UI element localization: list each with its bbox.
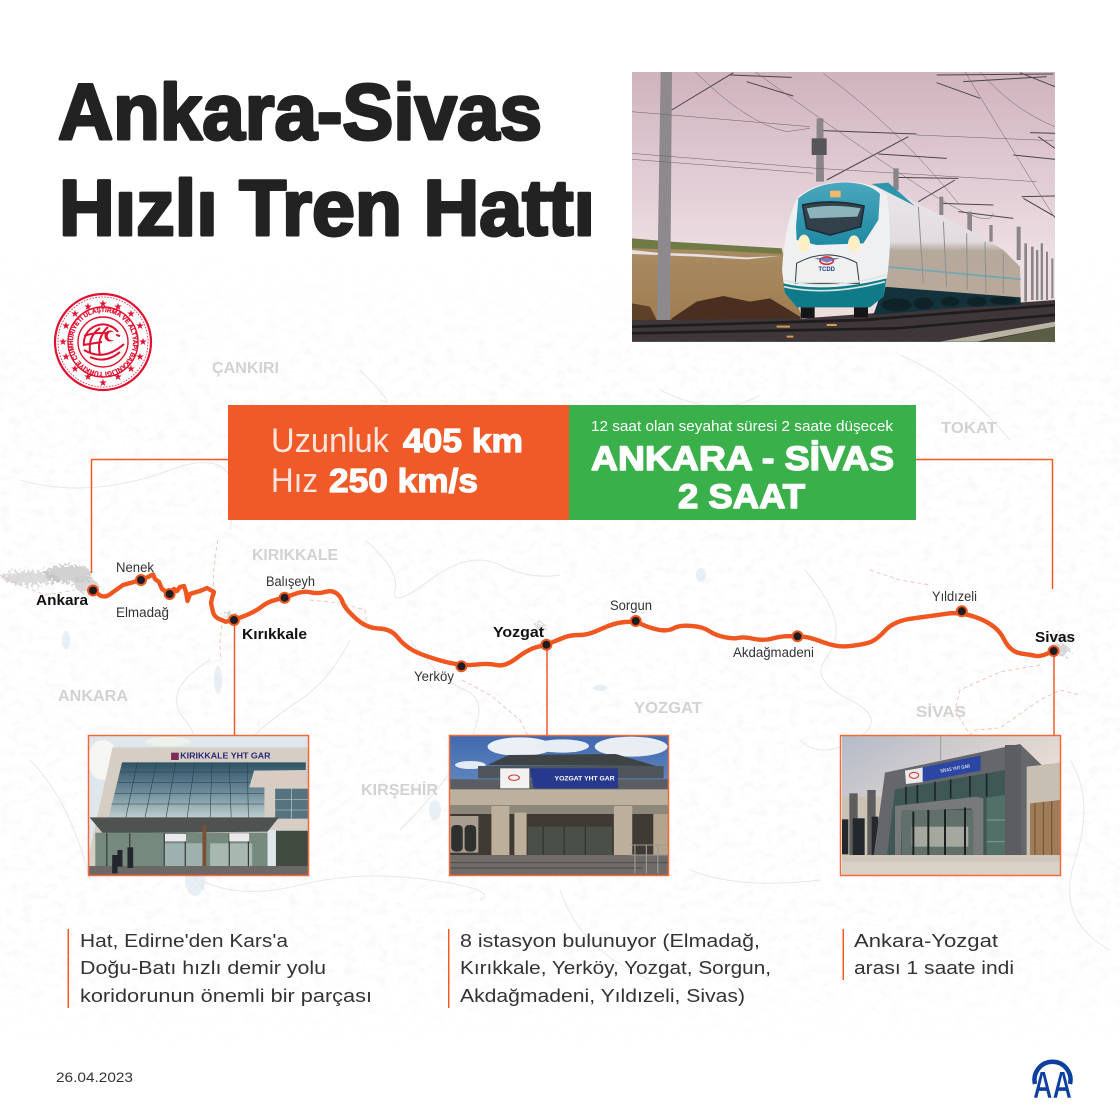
station labels: Balışeyh [266,574,315,589]
date: 26.04.2023 [56,1069,133,1085]
city labels: Sivas [1035,629,1075,646]
province labels: ANKARA [58,688,128,705]
logo: ministry seal: ★ [136,321,145,332]
text block: corridor: Doğu-Batı hızlı demir yolu [80,958,326,978]
text block: travel time [842,929,1014,980]
logo: ministry seal: ★ [114,372,123,383]
title: Ankara-Sivas [58,67,542,156]
text block: stations: Akdağmadeni, Yıldızeli, Sivas) [460,986,745,1006]
text block: corridor: koridorunun önemli bir parçası [80,986,372,1006]
logo: ministry seal: ★ [99,299,108,310]
logo: ministry seal: ★ [84,372,93,383]
province labels: KIRŞEHİR [361,781,438,799]
text block: stations: Kırıkkale, Yerköy, Yozgat, Sorgun, [460,958,771,978]
province labels [58,360,997,799]
logo: ministry seal: ★ [84,302,93,313]
text block: stations: 8 istasyon bulunuyor (Elmadağ, [460,931,760,951]
logo: ministry seal: ★ [127,309,136,320]
panel: travel time [569,405,916,520]
panel: travel time: 12 saat olan seyahat süresi 2 saate düşecek [591,418,894,435]
logo: ministry seal: ★ [71,309,80,320]
panel: length and speed: Uzunluk [271,422,390,460]
province labels: ÇANKIRI [212,360,279,377]
city labels: Ankara [36,592,89,609]
orange connector lines [92,460,1054,735]
photo: Sivas station [840,735,1061,876]
photo: Kırıkkale station: KIRIKKALE YHT GAR [180,751,271,761]
panel: length and speed [228,405,569,520]
station labels: Sorgun [610,598,652,613]
logo: ministry seal: ★ [136,352,145,363]
photo: Yozgat station: YOZGAT YHT GAR [555,775,615,783]
map background [0,354,1110,980]
photo: Kırıkkale station [88,735,309,876]
title [58,67,595,252]
logo: ministry seal: TÜRKİYE CUMHURİYETİ ULAŞTIRMA VE ALTYAPI BAKANLIĞI [68,308,138,378]
province labels: KIRIKKALE [252,547,338,564]
province labels: TOKAT [941,420,997,437]
photo: high-speed train [631,71,1056,343]
photo: Yozgat station [449,735,669,876]
province labels: YOZGAT [634,700,702,717]
panel: length and speed: 250 km/s [329,462,478,499]
station labels: Yıldızeli [932,589,977,604]
text block: stations [448,929,771,1008]
logo: Anadolu Agency: AA [1033,1065,1072,1107]
logo: ministry seal: ★ [139,337,148,348]
station labels [116,560,977,684]
panel: travel time: 2 SAAT [678,478,805,516]
text block: corridor: Hat, Edirne'den Kars'a [80,931,289,951]
city labels: Yozgat [493,624,544,641]
station labels: Yerköy [414,669,454,684]
city labels [36,592,1075,646]
logo: ministry seal: ★ [62,321,71,332]
city labels: Kırıkkale [242,626,307,643]
text block: travel time: Ankara-Yozgat [854,931,998,951]
logo: ministry seal: ★ [62,352,71,363]
panel: travel time: ANKARA - SİVAS [591,440,894,478]
station labels: Elmadağ [116,605,169,620]
logo: ministry seal [54,292,152,392]
logo: Anadolu Agency [1033,1062,1072,1107]
route line [88,574,1059,671]
logo: ministry seal: ★ [127,364,136,375]
photo: high-speed train: TCDD [818,267,836,273]
text block: travel time: arası 1 saate indi [854,958,1014,978]
station labels: Akdağmadeni [733,645,814,660]
photo: Sivas station: SİVAS YHT GAR [940,762,971,775]
province labels: SİVAS [916,703,966,721]
logo: ministry seal: ★ [114,302,123,313]
station labels: Nenek [116,560,154,575]
panel: length and speed: Hız [271,462,318,500]
logo: ministry seal: ★ [71,364,80,375]
title: Hızlı Tren Hattı [59,163,595,252]
panel: length and speed: 405 km [403,422,523,459]
text block: corridor [68,929,372,1008]
logo: ministry seal: ★ [99,378,108,389]
logo: ministry seal: ★ [59,337,68,348]
